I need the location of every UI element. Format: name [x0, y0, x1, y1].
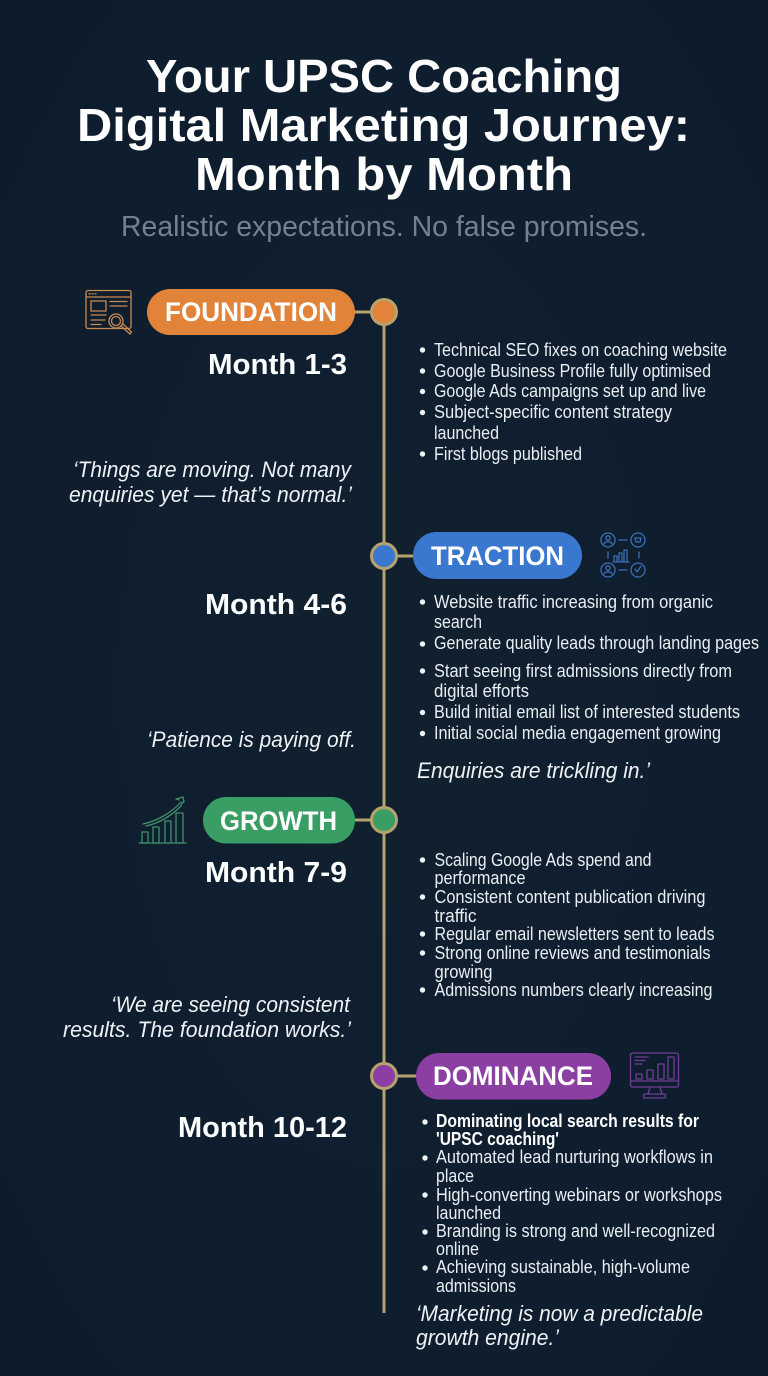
quote: dominance: ‘Marketing is now a predictable — [416, 1301, 703, 1326]
bullet list: growth: Strong online reviews and testimonials — [434, 943, 710, 963]
panel: growth — [63, 797, 714, 1042]
bullet list: growth: Admissions numbers clearly increasing — [434, 980, 712, 1000]
bullet list: dominance: Automated lead nurturing workflows in — [436, 1147, 713, 1167]
icon: rising bar chart — [139, 797, 186, 843]
node: growth — [355, 808, 396, 832]
title: Month by Month — [195, 148, 573, 200]
pill: growth: GROWTH — [220, 806, 337, 836]
timeline vertical line — [382, 312, 386, 1313]
bullet list: traction: Initial social media engagement growing — [434, 723, 721, 743]
panel: traction — [147, 532, 759, 783]
bullet list: growth: performance — [434, 868, 526, 888]
bullet list: traction: Start seeing first admissions directly from — [434, 661, 732, 681]
bullet list: growth: Consistent content publication driving — [434, 887, 706, 907]
pill: growth — [203, 797, 355, 844]
icon: people and chart network — [601, 533, 645, 577]
quote: foundation: ‘Things are moving. Not many — [73, 457, 353, 482]
panel: dominance — [178, 1053, 722, 1350]
quote: growth: results. The foundation works.’ — [63, 1017, 352, 1042]
node: dominance — [372, 1064, 417, 1088]
node: traction — [372, 544, 414, 568]
bullet list: traction — [420, 592, 759, 743]
quote: foundation — [69, 457, 353, 507]
bullet list: growth — [420, 850, 714, 1000]
bullet list: dominance: place — [436, 1166, 474, 1186]
bullet list: dominance: Dominating local search results for — [436, 1111, 699, 1131]
bullet list: foundation — [420, 340, 727, 464]
bullet list: dominance: Achieving sustainable, high-volume — [436, 1257, 690, 1277]
quote: growth: ‘We are seeing consistent — [111, 992, 351, 1017]
bullet list: foundation: Google Business Profile fully optimised — [434, 361, 711, 381]
bullet list: dominance: launched — [436, 1203, 501, 1223]
month label: 7-9: Month 7-9 — [205, 857, 347, 889]
pill: foundation: FOUNDATION — [165, 297, 337, 327]
pill: traction — [413, 532, 582, 579]
bullet list: dominance: 'UPSC coaching' — [436, 1129, 559, 1149]
bullet list: foundation: Technical SEO fixes on coaching website — [434, 340, 727, 360]
bullet list: traction: Website traffic increasing from organic — [434, 592, 713, 612]
quote: foundation: enquiries yet — that’s normal.’ — [69, 482, 353, 507]
bullet list: growth: Scaling Google Ads spend and — [434, 850, 652, 870]
pill: foundation — [147, 289, 355, 335]
bullet list: growth: growing — [434, 962, 492, 982]
bullet list: traction: search — [434, 612, 482, 632]
title: Digital Marketing Journey: — [77, 99, 690, 151]
bullet list: foundation: Subject-specific content strategy — [434, 402, 672, 422]
panel: foundation — [69, 289, 727, 507]
bullet list: dominance: Branding is strong and well-recognized — [436, 1221, 715, 1241]
bullet list: traction: Build initial email list of interested students — [434, 702, 740, 722]
quote: dominance — [416, 1301, 703, 1350]
bullet list: traction: digital efforts — [434, 681, 529, 701]
icon: monitor with bar chart — [630, 1053, 678, 1098]
bullet list: dominance: online — [436, 1239, 479, 1259]
icon: website with magnifier — [86, 290, 132, 334]
month label: 4-6: Month 4-6 — [205, 589, 347, 621]
quote: growth — [63, 992, 352, 1042]
bullet list: growth: traffic — [434, 906, 476, 926]
bullet list: dominance — [422, 1111, 722, 1296]
bullet list: dominance: admissions — [436, 1276, 516, 1296]
node: foundation — [355, 300, 396, 324]
quote: traction left: ‘Patience is paying off. — [147, 727, 356, 752]
bullet list: foundation: Google Ads campaigns set up and live — [434, 381, 706, 401]
bullet list: foundation: First blogs published — [434, 444, 582, 464]
pill: dominance: DOMINANCE — [433, 1061, 593, 1091]
bullet list: growth: Regular email newsletters sent to leads — [434, 924, 714, 944]
bullet list: dominance: High-converting webinars or workshops — [436, 1185, 722, 1205]
quote: traction right: Enquiries are trickling in.’ — [417, 758, 651, 783]
month label: 1-3: Month 1-3 — [208, 349, 347, 381]
month label: 10-12: Month 10-12 — [178, 1112, 347, 1144]
title — [77, 50, 690, 200]
subtitle: Realistic expectations. No false promises. — [121, 211, 647, 243]
title: Your UPSC Coaching — [146, 50, 622, 102]
pill: traction: TRACTION — [431, 541, 564, 571]
pill: dominance — [416, 1053, 611, 1100]
bullet list: foundation: launched — [434, 423, 499, 443]
quote: dominance: growth engine.’ — [416, 1325, 560, 1350]
